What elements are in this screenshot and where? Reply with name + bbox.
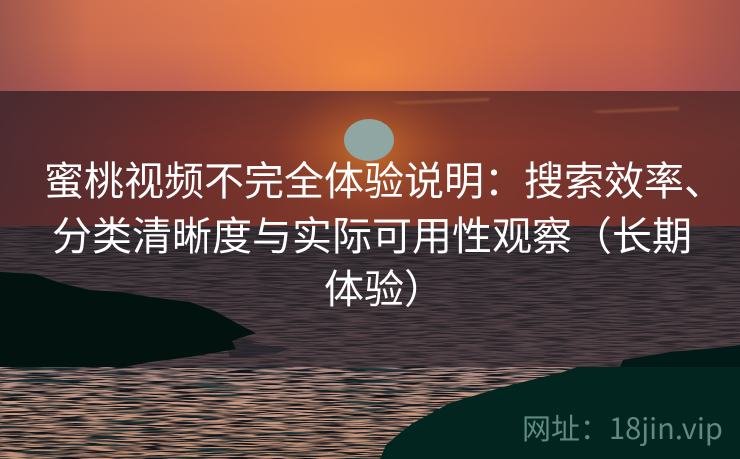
lower bright water [0,367,740,459]
title line 3: 体验） [324,268,444,312]
right island silhouette [380,345,740,459]
title [44,160,724,312]
left island silhouette [0,272,256,367]
left island tail shadow [225,340,290,358]
sun [344,119,394,161]
title line 2: 分类清晰度与实际可用性观察（长期 [52,215,692,259]
darkened sky band [0,91,740,227]
watermark url: 网址：18jin.vip [522,406,723,448]
title line 1: 蜜桃视频不完全体验说明：搜索效率、 [44,160,724,204]
darkened sea [0,226,740,367]
sky [0,0,740,92]
